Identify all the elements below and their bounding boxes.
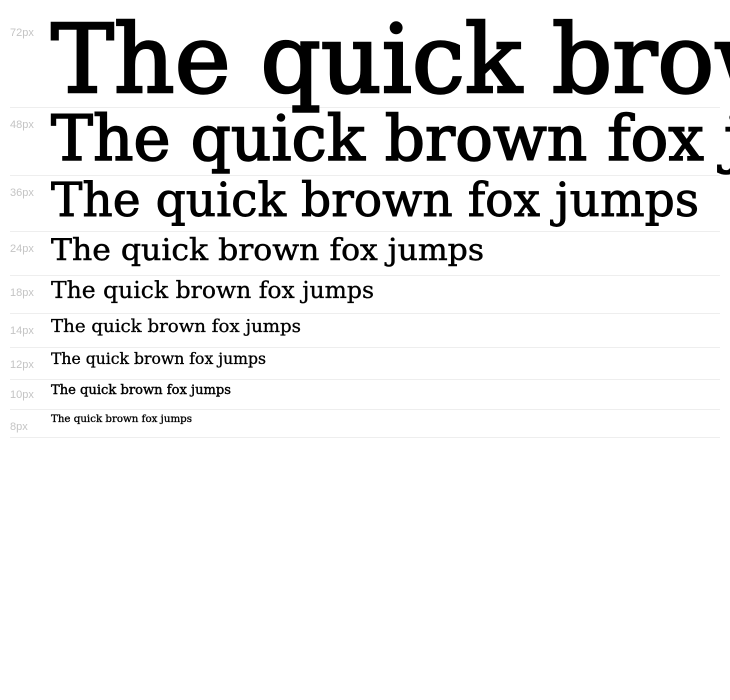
row: 36px label: 36px [10,187,34,199]
row: 18px sample: The quick brown fox jumps [51,278,374,304]
row: 14px sample: The quick brown fox jumps [51,316,301,337]
row: 14px label: 14px [10,325,34,337]
row: 36px sample: The quick brown fox jumps [51,173,699,228]
row: 72px label: 72px [10,27,34,39]
row: 48px label: 48px [10,119,34,131]
row: 24px sample: The quick brown fox jumps [51,233,484,268]
row: 12px label: 12px [10,359,34,371]
row: 10px sample: The quick brown fox jumps [51,383,231,398]
row: 24px label: 24px [10,243,34,255]
row: 18px label: 18px [10,287,34,299]
row: 12px sample: The quick brown fox jumps [51,350,266,368]
row: 8px sample: The quick brown fox jumps [51,413,192,425]
row: 10px label: 10px [10,389,34,401]
row: 8px label: 8px [10,421,28,433]
